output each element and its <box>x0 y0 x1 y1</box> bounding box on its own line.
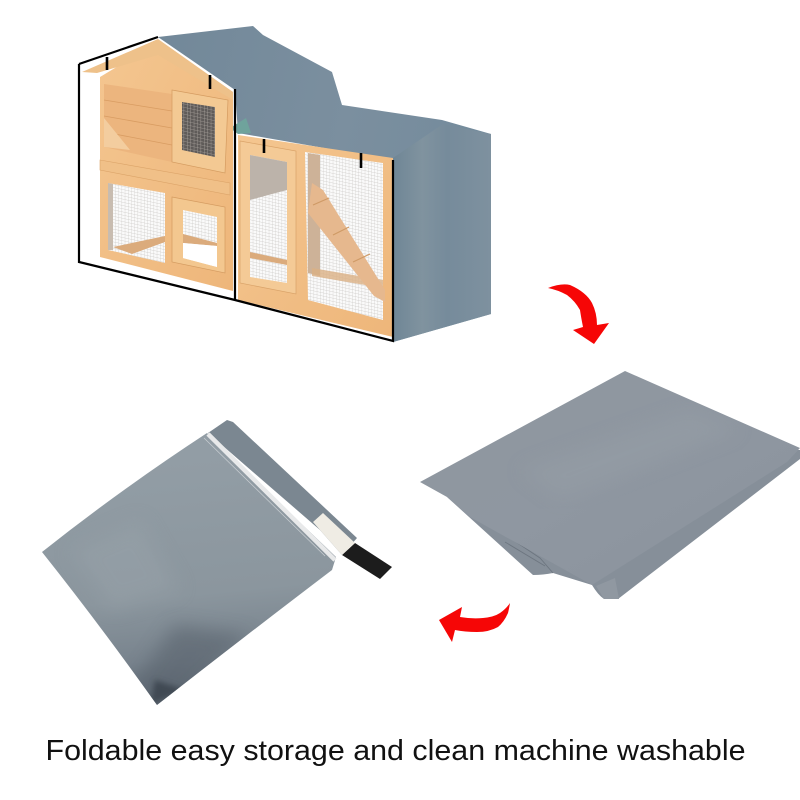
zipper stitching <box>204 438 325 556</box>
door outer frame <box>240 141 296 294</box>
white label <box>313 513 355 555</box>
under layers <box>447 450 800 599</box>
roof barge boards <box>82 39 233 100</box>
plank panel <box>104 84 172 162</box>
top sheet <box>420 371 800 585</box>
folded grey cover <box>420 371 800 599</box>
body and gable <box>100 42 233 291</box>
teal cover flap <box>230 118 251 134</box>
zipper <box>208 434 335 560</box>
bottom fold highlight <box>596 578 619 599</box>
left wooden hutch section <box>82 39 233 291</box>
upper door with dark mesh <box>172 90 228 173</box>
storage pouch <box>42 420 392 710</box>
body shading <box>136 622 244 705</box>
run door mesh <box>250 155 287 283</box>
middle rail <box>100 160 230 195</box>
main body <box>42 433 336 705</box>
cloth sheen <box>520 410 740 500</box>
lower door <box>172 197 225 273</box>
ramp with rungs <box>308 183 385 302</box>
caption: Foldable easy storage and clean machine washable <box>46 735 746 767</box>
covered rabbit hutch illustration <box>79 26 491 342</box>
fold creases <box>498 530 553 573</box>
red arrow: hutch to folded cover <box>548 284 609 344</box>
red arrow: folded cover to pouch <box>439 603 510 642</box>
lower left mesh panel <box>108 183 165 263</box>
black cover edge lines <box>79 37 393 341</box>
back band <box>208 420 357 555</box>
run main mesh <box>305 152 383 320</box>
black strap <box>342 543 392 579</box>
grey cover: roof and side <box>158 26 491 342</box>
right wooden run section <box>238 135 393 337</box>
